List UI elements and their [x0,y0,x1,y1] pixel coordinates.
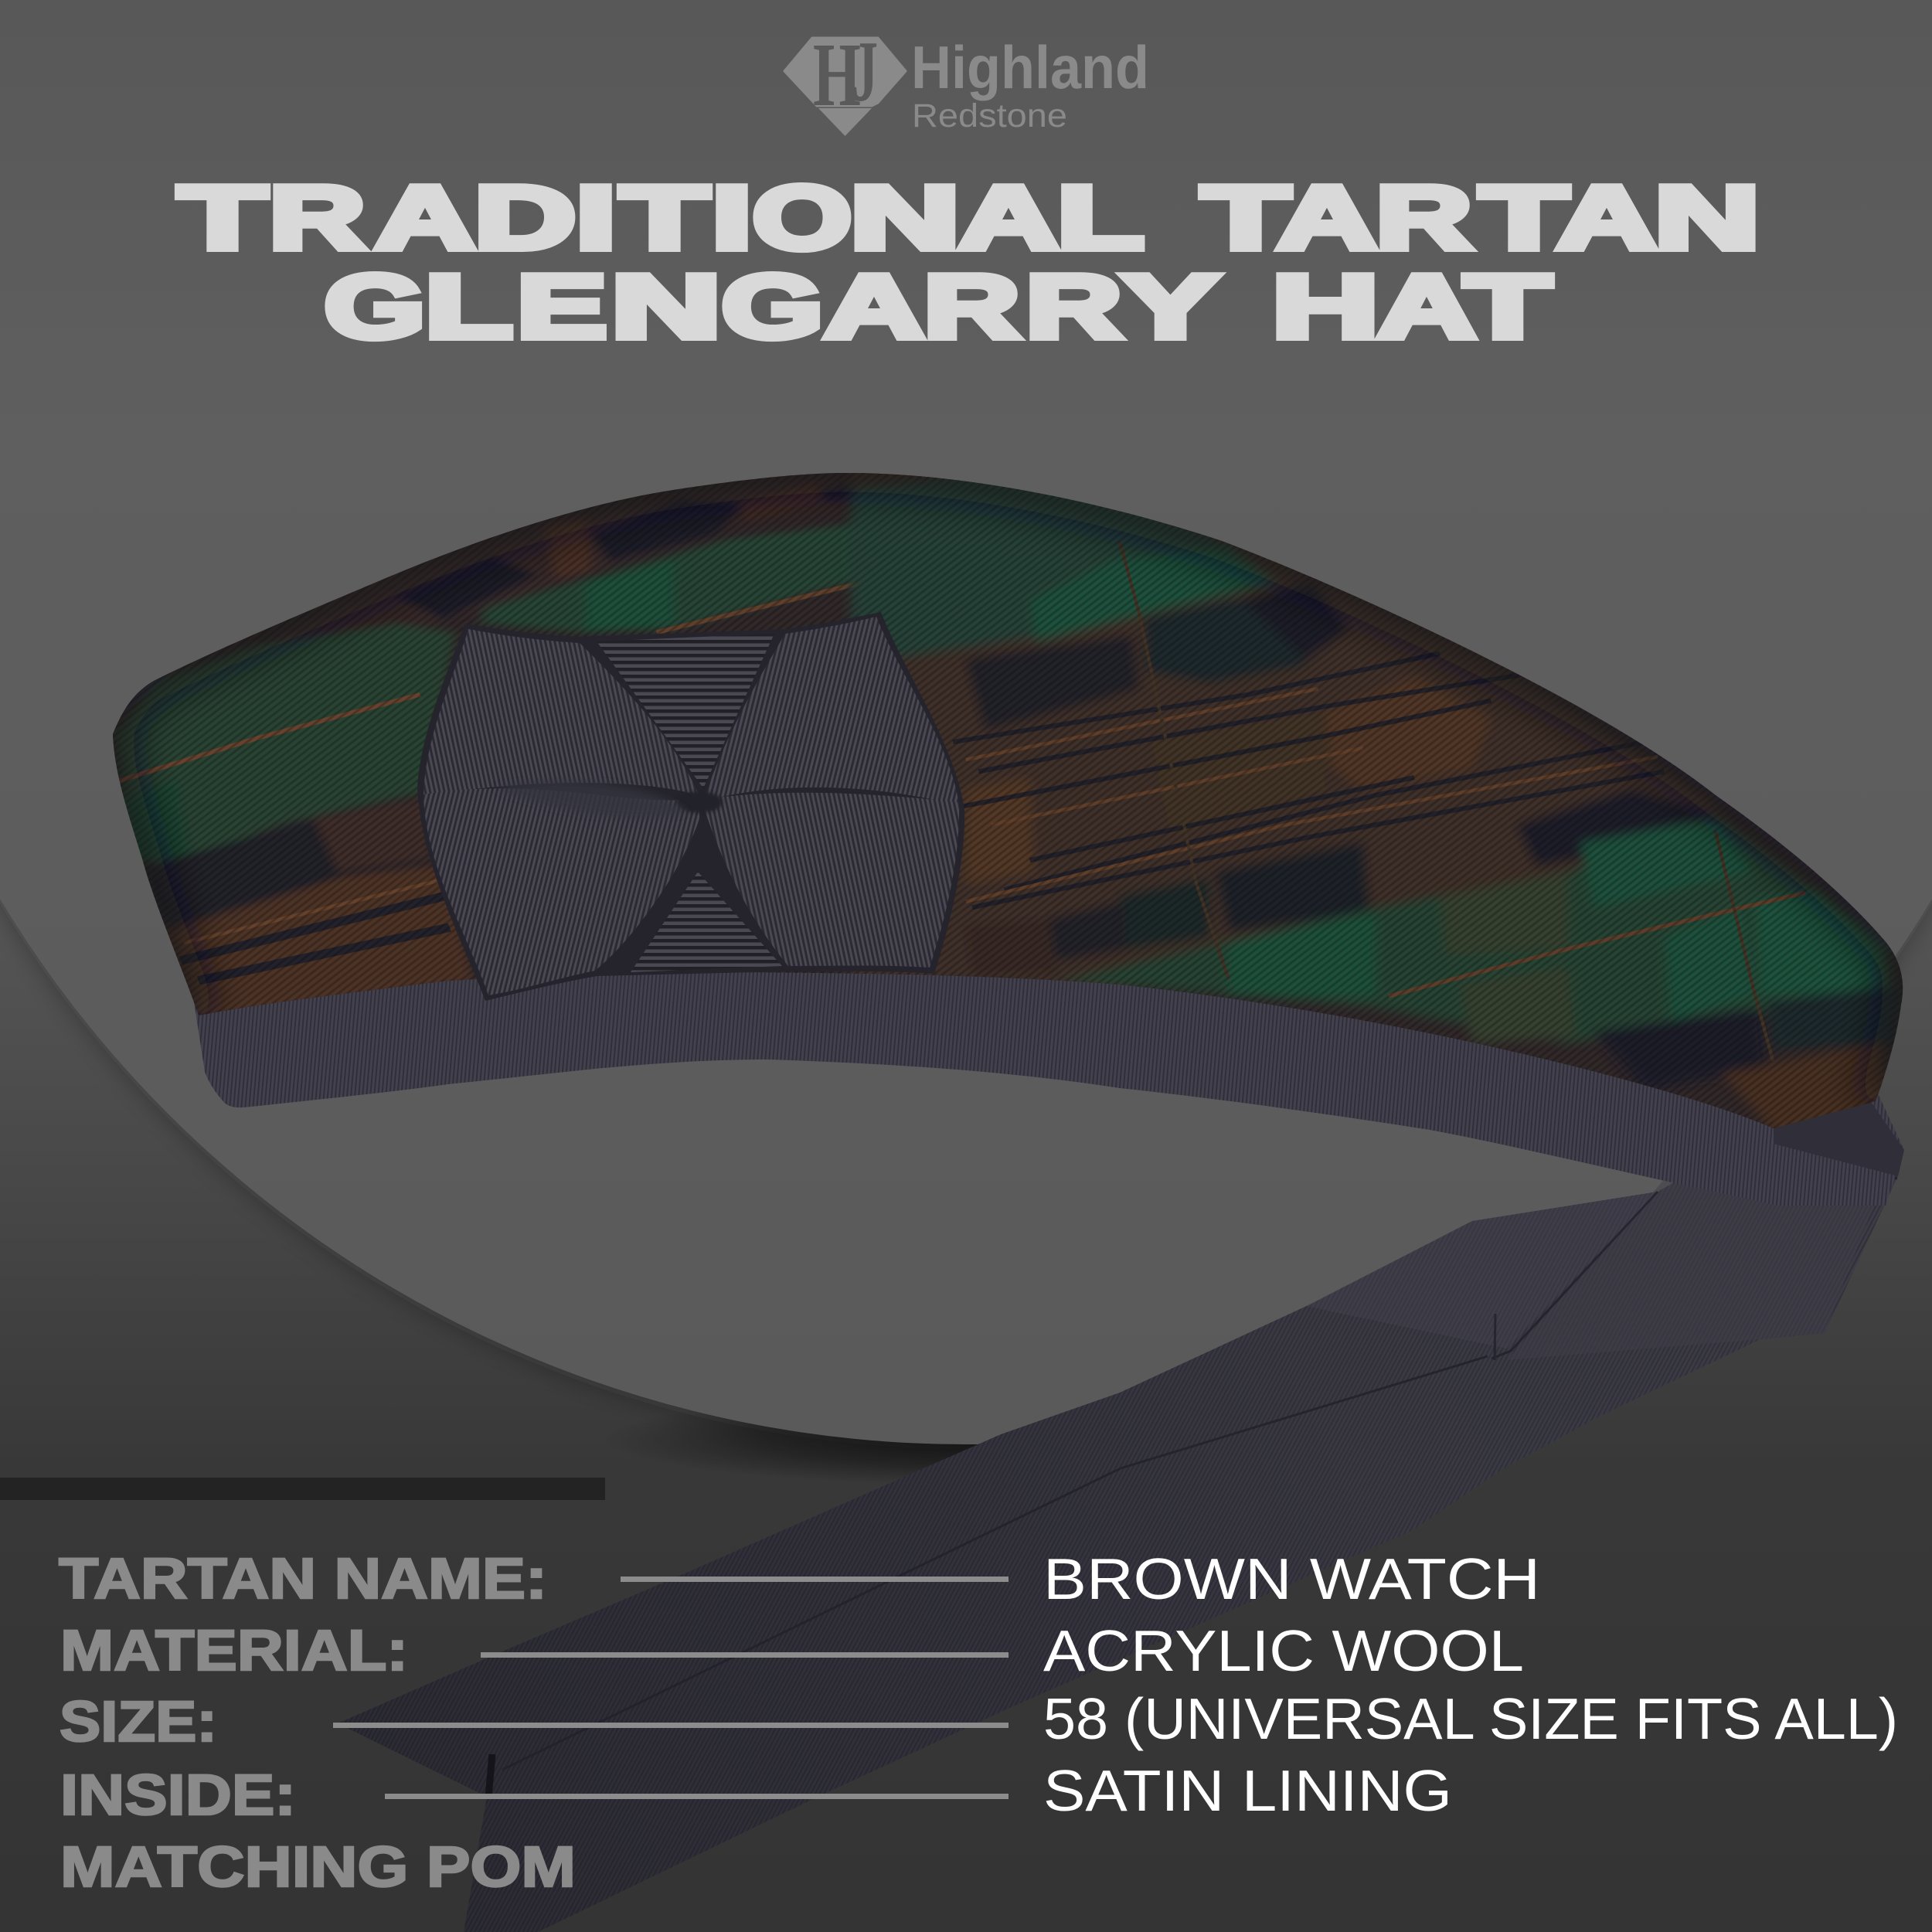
label: size: SIZE: [60,1689,217,1753]
title line 1: A [1556,167,1657,267]
value: size: 58 (UNIVERSAL SIZE FITS ALL) [1043,1686,1898,1751]
value: tartan name: BROWN WATCH [1043,1546,1540,1611]
plaid blocks right [851,464,1901,1138]
hat crown tartan [77,448,1932,1144]
background disc [0,0,1932,1444]
crown edge shading [113,473,1903,1101]
title line 1: I [712,167,752,267]
title line 2: N [611,257,721,357]
logo [784,24,1149,136]
disc shadow [0,0,1932,1485]
title line 2: H [1272,257,1379,357]
title line 2: G [325,257,425,357]
title line 1: N [850,167,960,267]
title line 2: R [1026,257,1122,357]
title line 1: T [179,167,267,267]
leader line: inside [385,1794,1009,1799]
title line 1: N [1655,167,1760,267]
leader line: size [333,1723,1009,1728]
title line 1: T [1202,167,1290,267]
title line 2 [325,257,1551,357]
bow top pleat [597,634,774,788]
spec rows [59,1546,1898,1899]
title line 1 [179,167,1760,267]
title line 1: A [1277,167,1377,267]
ribbon right twist [1774,1100,1904,1176]
title line 1: I [576,167,616,267]
strap fold panels [488,1132,1897,1797]
title line 2: R [924,257,1020,357]
bow left upper wing [423,629,699,796]
title line 2: E [517,257,607,357]
bow right upper wing [703,617,959,805]
leader line: material [481,1652,1009,1658]
logo wordmark: Redstone: Redstone [912,97,1067,134]
label: tartan name: TARTAN NAME: [59,1546,547,1611]
title line 1: O [753,167,852,267]
title line 2: T [1464,257,1551,357]
bow shading [495,781,688,818]
bow on hat [417,612,964,1001]
leader line: tartan name [621,1577,1009,1582]
title [179,167,1760,357]
title line 2: L [425,257,512,357]
strap: hanging ribbon tail [338,1100,1904,1932]
bow bottom pleat [631,872,782,972]
value: inside: SATIN LINING [1043,1758,1452,1823]
bow right lower wing [702,793,959,968]
value: material: ACRYLIC WOOL [1043,1618,1524,1683]
title line 2: A [824,257,924,357]
hat band ribbon [193,960,1904,1206]
title line 1: D [474,167,576,267]
bow backing [417,612,964,1001]
plaid blocks left [117,485,855,1015]
title line 1: L [1057,167,1144,267]
label: material: MATERIAL: [60,1618,408,1682]
label: matching pom: MATCHING POM [60,1835,576,1899]
title line 1: A [376,167,474,267]
bow centre knot [676,791,723,813]
title line 1: T [621,167,709,267]
title line 1: R [1376,167,1471,267]
logo wordmark: Highland: Highland [911,33,1149,101]
title line 1: R [269,167,365,267]
title line 2: A [1377,257,1476,357]
logo icon: diamond monogram: J [852,24,878,120]
title line 2: G [722,257,823,357]
title line 1: T [1480,167,1568,267]
title line 2: Y [1122,257,1219,357]
logo icon: diamond monogram [784,24,906,136]
label: inside: INSIDE: [60,1763,296,1827]
title line 1: A [958,167,1059,267]
bow left lower wing [423,788,699,995]
fabric twill texture [119,485,1887,1128]
logo icon: diamond monogram: H [813,24,861,125]
decorative bar [0,1478,605,1500]
desaturating overlay [156,692,437,938]
